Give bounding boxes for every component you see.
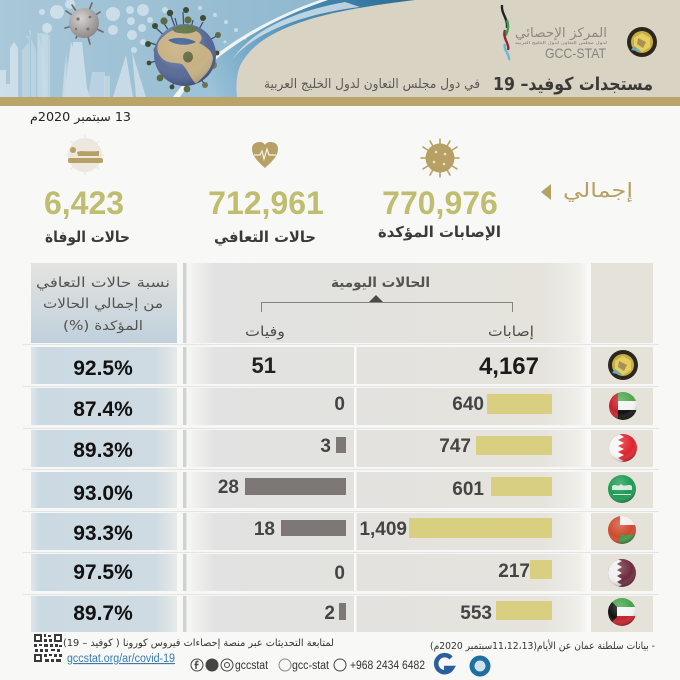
row: Kuwait: 89.7% bbox=[73, 602, 133, 625]
text: phone number: +968 2434 6482 bbox=[350, 660, 425, 672]
bar: Saudi cases bbox=[491, 477, 552, 496]
row: Qatar: 97.5% bbox=[73, 561, 133, 584]
bar: Kuwait cases bbox=[496, 601, 552, 620]
stat: deaths value: 6,423 bbox=[44, 185, 124, 221]
icon: Qatar flag bbox=[608, 559, 636, 587]
text: follow updates: لمتابعة التحديثات عبر منصة إحصاءات فيروس كورونا ( كوفيد – 19) bbox=[63, 638, 334, 649]
logo: tuv mark bbox=[470, 656, 490, 676]
icon: Kuwait flag bbox=[608, 598, 636, 626]
row: UAE bbox=[73, 392, 637, 421]
icon: heart bbox=[252, 142, 278, 168]
icon: Bahrain flag bbox=[609, 434, 637, 462]
row: Saudi Arabia: 601 bbox=[452, 479, 484, 500]
panel: totals bbox=[44, 135, 633, 246]
row: Oman: 93.3% bbox=[73, 522, 133, 545]
row: UAE: 87.4% bbox=[73, 398, 133, 421]
row: GCC total bbox=[73, 350, 638, 380]
bar: Saudi deaths bbox=[245, 478, 346, 495]
panel: table backgrounds bbox=[23, 263, 659, 632]
skyline bbox=[0, 30, 146, 97]
row: Bahrain: 3 bbox=[320, 436, 331, 457]
heading: daily cases bbox=[262, 275, 512, 312]
row: Saudi Arabia bbox=[73, 475, 636, 505]
stat: recoveries label: حالات التعافي bbox=[214, 228, 316, 246]
bar: Oman deaths bbox=[281, 520, 346, 536]
subtitle: في دول مجلس التعاون لدول الخليج العربية bbox=[264, 77, 480, 92]
row: Bahrain bbox=[73, 434, 637, 462]
row: Bahrain: 747 bbox=[439, 436, 471, 457]
bar: Bahrain deaths bbox=[336, 437, 346, 453]
icon: Saudi flag bbox=[608, 475, 636, 503]
row: GCC total: 92.5% bbox=[73, 357, 133, 380]
row: Qatar bbox=[73, 559, 636, 587]
icon: virus bbox=[421, 139, 459, 177]
heading: recovery rate column: نسبة حالات التعافي bbox=[36, 275, 170, 291]
row: Qatar: 0 bbox=[334, 563, 345, 584]
logo: quality mark bbox=[436, 655, 452, 672]
logo: gcc-stat arabic name: المركز الإحصائي bbox=[515, 26, 607, 41]
icon: QR code bbox=[34, 634, 62, 662]
link: covid page: gccstat.org/ar/covid-19 bbox=[67, 653, 175, 665]
row: Kuwait: 2 bbox=[324, 603, 335, 624]
row: Oman bbox=[73, 516, 636, 545]
icon: coronavirus globe bbox=[145, 7, 221, 92]
row: Oman: 1,409 bbox=[359, 519, 407, 540]
bokeh dots bbox=[39, 0, 246, 53]
icon: Oman flag bbox=[608, 516, 636, 544]
icon: gcc emblem bbox=[627, 27, 657, 57]
date: 13 سبتمبر 2020م bbox=[30, 109, 131, 125]
text: linkedin handle: gcc-stat bbox=[292, 660, 330, 672]
icons: social media bbox=[191, 659, 346, 671]
bar: Bahrain cases bbox=[476, 436, 552, 455]
heading: recovery rate column: المؤكدة (%) bbox=[63, 319, 143, 334]
stat: deaths label: حالات الوفاة bbox=[45, 228, 130, 246]
heading: daily cases: الحالات اليومية bbox=[331, 275, 430, 291]
row: GCC total: 51 bbox=[252, 353, 276, 378]
title: مستجدات كوفيد– 19 bbox=[493, 74, 653, 95]
heading: recovery rate column: من إجمالي الحالات bbox=[43, 296, 163, 312]
icon: grey virus bbox=[65, 3, 103, 44]
row: GCC total: 4,167 bbox=[479, 353, 539, 380]
bar: Kuwait deaths bbox=[339, 603, 346, 620]
icon: UAE flag bbox=[609, 392, 637, 420]
bar: Qatar cases bbox=[530, 560, 552, 579]
row: Kuwait bbox=[73, 598, 636, 626]
stat: confirmed cases value: 770,976 bbox=[382, 185, 498, 221]
row: Saudi Arabia: 28 bbox=[218, 477, 239, 498]
text: data note: - بيانات سلطنة عمان عن الأيام(11،12،13سبتمبر 2020م) bbox=[430, 639, 655, 652]
heading: recovery rate column bbox=[36, 275, 170, 334]
logo: gcc-stat subtitle: لدول مجلس التعاون لدول الخليج العربية bbox=[515, 40, 607, 45]
row: UAE: 0 bbox=[334, 394, 345, 415]
row: Oman: 18 bbox=[254, 519, 275, 540]
row: Saudi Arabia: 93.0% bbox=[73, 482, 133, 505]
icon: patient in bed bbox=[66, 135, 104, 175]
row: UAE: 640 bbox=[452, 394, 484, 415]
heading: total: إجمالي bbox=[563, 178, 633, 203]
stat: recoveries value: 712,961 bbox=[208, 185, 324, 221]
row: Bahrain: 89.3% bbox=[73, 439, 133, 462]
arrow: total marker bbox=[541, 184, 551, 200]
row: Qatar: 217 bbox=[498, 561, 530, 582]
bar: Oman cases bbox=[409, 518, 552, 538]
heading: cases column: إصابات bbox=[488, 324, 534, 340]
row: Kuwait: 553 bbox=[460, 603, 492, 624]
logo: gcc-stat latin name: GCC-STAT bbox=[545, 45, 606, 61]
icon: gcc emblem bbox=[608, 350, 638, 380]
header banner bbox=[0, 0, 680, 106]
gold strip bbox=[0, 97, 680, 106]
bar: UAE cases bbox=[487, 394, 552, 414]
stat: confirmed cases label: الإصابات المؤكدة bbox=[378, 223, 501, 241]
logo: gcc-stat ribbon bbox=[502, 5, 509, 60]
panel: footer bbox=[34, 634, 655, 676]
text: social handle: gccstat bbox=[235, 660, 269, 672]
heading: deaths column: وفيات bbox=[245, 324, 285, 340]
